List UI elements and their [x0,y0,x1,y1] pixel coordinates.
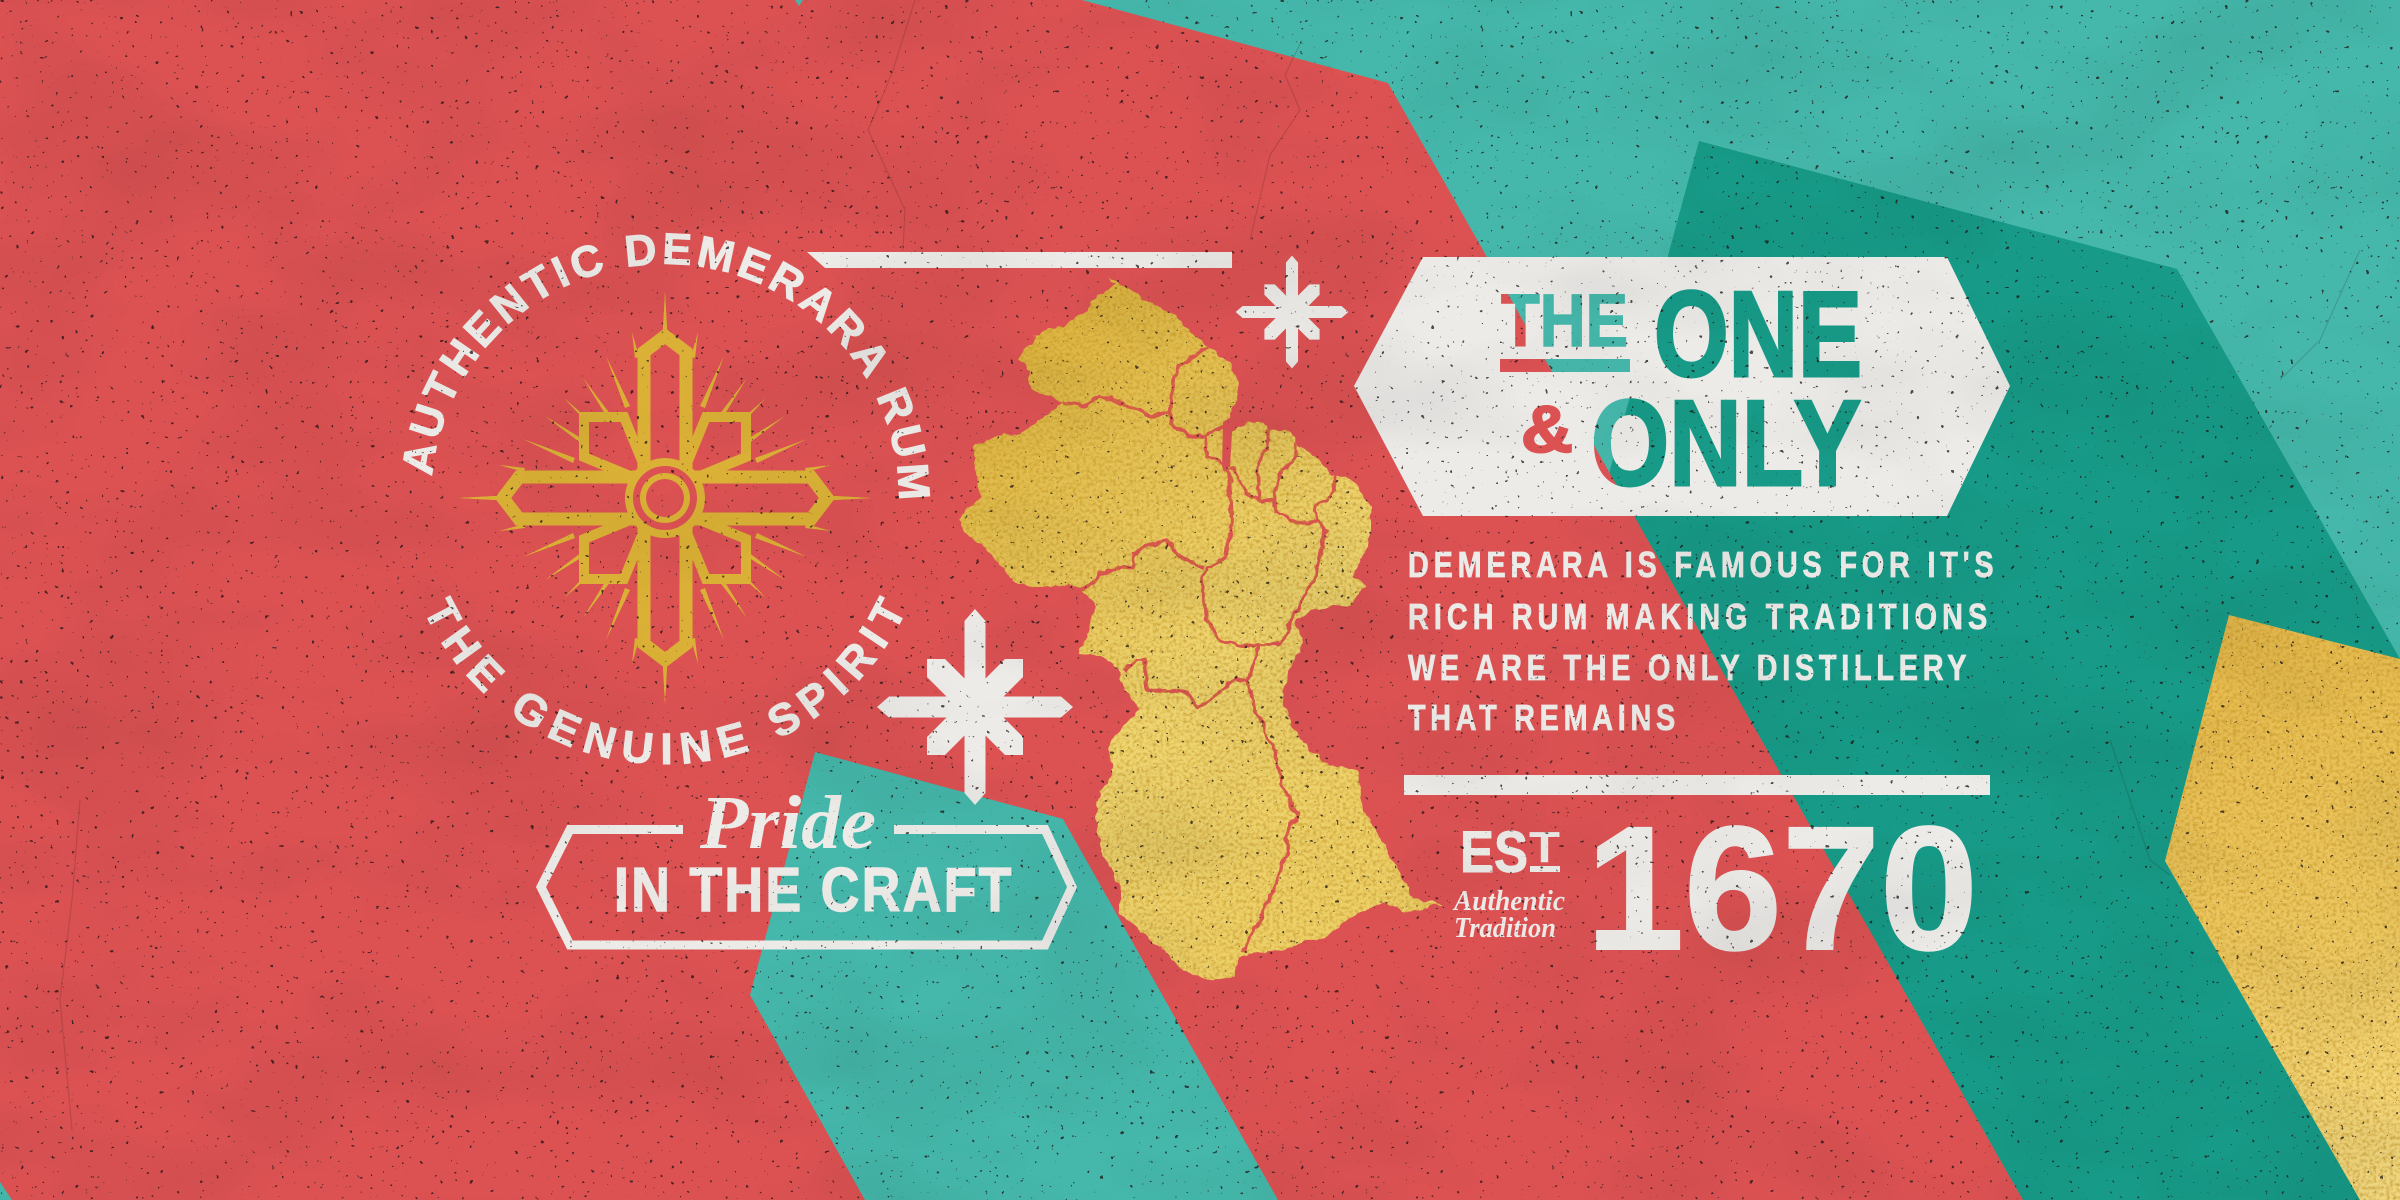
body paragraph: DEMERARA IS FAMOUS FOR IT'S [1408,544,1994,585]
icon: large asterisk star [877,609,1073,805]
icon: small asterisk star [1236,256,1348,368]
headline: ONLY: ONLY [1591,375,1861,511]
headline: THE: THE [1501,279,1628,362]
top rule [807,252,1232,268]
gold emblem: compass cross with sunburst [459,292,871,704]
EST label: ES [1460,820,1528,885]
circular text: bottom arc: THE GENUINE SPIRIT [427,595,903,764]
lower rule [1404,775,1990,795]
script: Authentic Tradition [1452,886,1566,944]
body paragraph: RICH RUM MAKING TRADITIONS [1408,596,1987,637]
script: Authentic Tradition: Tradition [1454,913,1556,944]
map of Guyana regions in gold [957,275,1440,979]
headline: ONE: ONE [1654,266,1862,402]
script: Authentic Tradition: Authentic [1452,886,1566,917]
white hexagon panel [1354,257,2010,516]
body paragraph: WE ARE THE ONLY DISTILLERY [1408,647,1967,688]
body paragraph [1408,544,1994,738]
headline: ampersand: & [1521,392,1573,466]
year 1670: 1670 [1586,791,1978,987]
gold corner panel [2165,615,2400,1200]
badge: Pride in the craft [541,781,1072,945]
body paragraph: THAT REMAINS [1408,697,1675,738]
EST label: T [1529,823,1560,872]
badge: Pride in the craft: IN THE CRAFT [614,856,1011,925]
circular text: top arc: AUTHENTIC DEMERARA RUM [403,232,930,498]
badge: Pride in the craft: Pride [699,781,876,865]
